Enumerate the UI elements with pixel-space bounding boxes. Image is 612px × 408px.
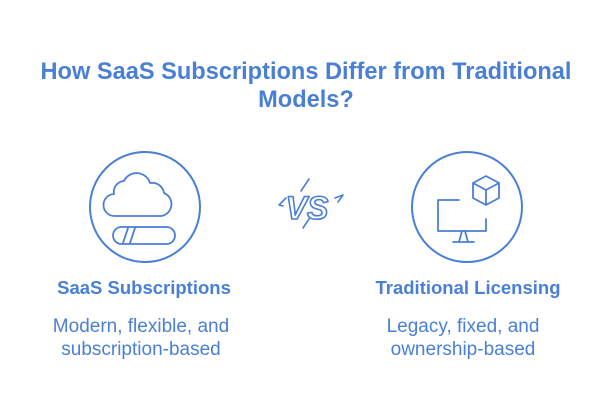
text: traditional description: ownership-based <box>391 339 535 360</box>
text: saas description <box>53 316 229 360</box>
title: How SaaS Subscriptions Differ from Traditional <box>41 59 571 85</box>
title <box>41 59 571 113</box>
icon: licensing circle <box>412 152 522 262</box>
text: saas description: Modern, flexible, and <box>53 316 229 337</box>
text: traditional description: Legacy, fixed, and <box>387 316 539 337</box>
icon: VS <box>279 179 343 228</box>
icon: cloud subscription circle <box>90 152 200 262</box>
icon: VS: VS <box>286 190 329 226</box>
heading: SaaS Subscriptions: SaaS Subscriptions <box>57 277 231 298</box>
heading: Traditional Licensing: Traditional Licensing <box>375 277 561 298</box>
text: saas description: subscription-based <box>61 339 221 360</box>
text: traditional description <box>387 316 539 360</box>
title: Models? <box>258 87 354 113</box>
